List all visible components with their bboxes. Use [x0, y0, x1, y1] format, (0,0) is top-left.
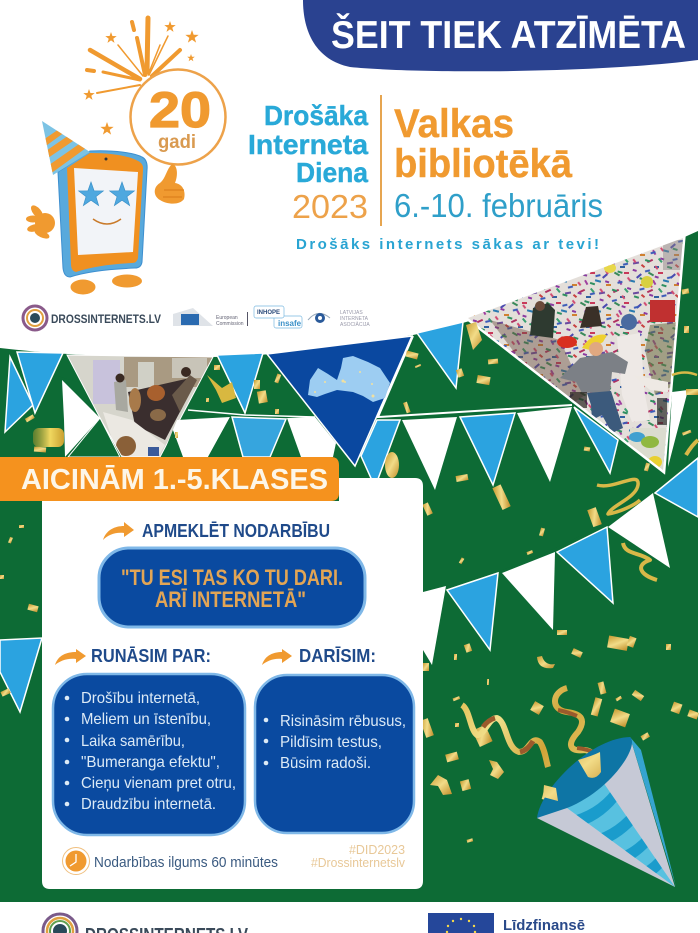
logo: EU flag: [428, 913, 494, 933]
section heading: we will talk about: RUNĀSIM PAR:: [91, 646, 211, 666]
callout: workshop title: "TU ESI TAS KO TU DARI.: [121, 565, 343, 590]
event title: Interneta: [248, 129, 368, 160]
event title: Drošāka: [264, 100, 368, 131]
callout: workshop title: ARĪ INTERNETĀ": [155, 587, 306, 612]
event title: [248, 100, 368, 225]
bunting: left and top pennants: [5, 352, 336, 457]
vertical divider: [380, 95, 382, 226]
hashtags: #Drossinternetslv: [311, 855, 405, 870]
panel: talk topics list: Draudzību internetā.: [81, 796, 216, 813]
logo: European Commission: Commission: [216, 321, 244, 327]
icon: arrow: [55, 649, 86, 665]
badge: 20 gadi: gadi: [158, 132, 196, 153]
logo: Latvian internet association: ASOCIĀCIJA: [340, 321, 370, 328]
icon: arrow: [262, 649, 292, 665]
panel: talk topics list: Cieņu vienam pret otru,: [81, 775, 236, 792]
icon: clock: [62, 848, 90, 874]
orange banner: invitation: [0, 457, 339, 501]
logo: drossinternets footer: [43, 914, 248, 933]
duration note: Nodarbības ilgums 60 minūtes: [94, 854, 278, 871]
panel: activities list: Pildīsim testus,: [280, 734, 382, 751]
panel: talk topics list: "Bumeranga efektu",: [81, 754, 220, 771]
footer: [0, 902, 700, 933]
logo: INHOPE insafe: insafe: [278, 319, 302, 328]
logo: drossinternets: DROSSINTERNETS.LV: [51, 312, 161, 326]
panel: talk topics list: Meliem un īstenību,: [81, 711, 211, 728]
callout: workshop title: [99, 548, 365, 627]
green background field: [0, 231, 698, 902]
bunting: lower row pennants: [0, 458, 698, 902]
icon: arrow: [103, 522, 134, 540]
section heading: we will do: [262, 646, 376, 666]
panel: activities list: Risināsim rēbusus,: [280, 713, 406, 730]
event title: 2023: [292, 188, 368, 225]
location and date: [394, 102, 603, 224]
map: Latvia: [308, 356, 390, 402]
partner logos row: [23, 306, 370, 330]
photo: confetti party: [460, 230, 690, 475]
location and date: bibliotēkā: [394, 142, 573, 186]
top banner: [303, 0, 698, 71]
location and date: Valkas: [394, 102, 514, 146]
panel: talk topics list: Laika samērību,: [81, 733, 185, 750]
logo: Latvian internet association: [340, 310, 370, 328]
tablet body: [58, 151, 147, 277]
panel: main white card: [42, 478, 423, 889]
event title: Diena: [296, 157, 368, 188]
panel: activities list: [255, 675, 414, 833]
icon: firework rays: [87, 18, 180, 93]
photo: workshop group: [66, 354, 214, 457]
panel: talk topics list: [53, 674, 245, 835]
smile: [93, 219, 121, 224]
mascot: tablet with party hat: [26, 18, 226, 294]
slogan: Drošāks internets sākas ar tevi!: [296, 236, 599, 253]
logo: European Commission: European: [216, 315, 238, 321]
gold confetti: [0, 288, 699, 843]
section: attend workshop: [103, 521, 330, 541]
hashtags: #DID2023: [349, 842, 405, 857]
logo: INHOPE insafe: [254, 306, 302, 328]
bunting: middle row pennants: [361, 322, 688, 490]
panel: talk topics list: Drošību internetā,: [81, 690, 200, 707]
icon: feet: [70, 274, 142, 294]
logo: eye: [308, 313, 330, 323]
icon: party popper: [537, 737, 676, 887]
hashtags: [311, 842, 405, 870]
icon: left hand: [26, 203, 55, 241]
heading: APMEKLĒT NODARBĪBU: [142, 521, 330, 541]
logo: European Commission: [173, 308, 248, 327]
icon: party hat: [40, 121, 90, 177]
section heading: we will do: DARĪSIM:: [299, 646, 376, 666]
map triangle with Latvia: [267, 336, 412, 466]
icon: star eyes: [79, 182, 134, 206]
badge: 20 gadi: [130, 70, 226, 164]
logo: Latvian internet association: INTERNETA: [340, 316, 369, 322]
location and date: 6.-10. februāris: [394, 187, 603, 224]
logo: INHOPE insafe: INHOPE: [257, 310, 280, 316]
logo: Latvian internet association: LATVIJAS: [340, 310, 363, 316]
icon: firework stars: [83, 21, 199, 135]
gold ribbons: [462, 372, 698, 775]
banner text: AICINĀM 1.-5.KLASES: [21, 464, 328, 496]
badge: 20 gadi: 20: [149, 82, 211, 138]
logo: drossinternets: [23, 306, 161, 330]
panel: activities list: Būsim radoši.: [280, 755, 371, 772]
icon: thumbs up hand: [155, 164, 185, 204]
